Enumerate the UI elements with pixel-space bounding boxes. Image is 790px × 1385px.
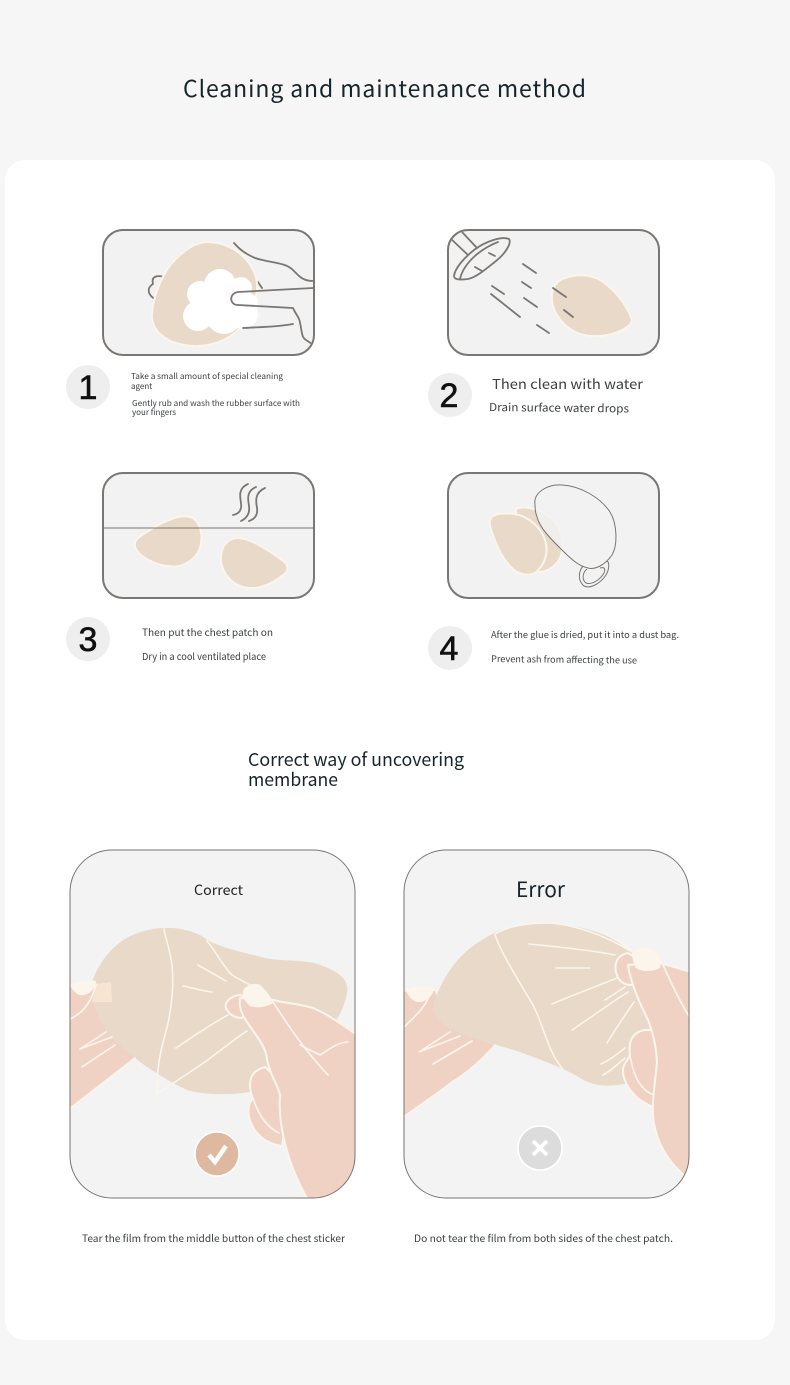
panel: step 2 illustration	[448, 230, 659, 355]
step 1 text	[131, 371, 300, 418]
heading: uncovering membrane	[248, 746, 464, 792]
icon: shower head	[450, 232, 510, 280]
error caption: Do not tear the film from both sides of the chest patch.	[414, 1230, 673, 1245]
right hand lower fingers	[249, 1066, 282, 1145]
step 2 text: Drain surface water drops	[489, 399, 629, 416]
correct caption: Tear the film from the middle button of the chest sticker	[82, 1230, 345, 1245]
label: correct: Correct	[194, 880, 244, 900]
step 3 number	[66, 617, 110, 661]
icon: steam	[233, 484, 265, 521]
step 3 number: 3	[79, 621, 97, 659]
creases	[157, 929, 254, 1094]
step 2 number: 2	[440, 377, 458, 415]
right hand	[614, 952, 632, 986]
step 1 text: agent	[131, 381, 152, 392]
title: Cleaning and maintenance method	[183, 70, 586, 104]
icon: cross mark	[518, 1126, 562, 1170]
step 1 number	[66, 365, 110, 409]
step 4 number	[428, 626, 472, 670]
panel: step 1 illustration	[103, 230, 314, 355]
step 4 number: 4	[440, 630, 458, 668]
step 1 text: your fingers	[132, 407, 176, 418]
step 1 text: Gently rub and wash the rubber surface with	[132, 398, 300, 409]
step 2 text	[489, 373, 644, 416]
panel: correct	[68, 850, 360, 1200]
step 3 text: Dry in a cool ventilated place	[142, 649, 266, 663]
panel: step 4 illustration	[448, 473, 659, 598]
left hand	[402, 987, 495, 1118]
step 3 text: Then put the chest patch on	[142, 624, 273, 639]
step 2 text: Then clean with water	[492, 373, 644, 393]
panel: error	[402, 850, 695, 1198]
step 2 number	[428, 373, 472, 417]
icon: dust bag	[535, 485, 616, 587]
creases	[495, 923, 634, 1075]
step 4 text: After the glue is dried, put it into a dust bag.	[491, 628, 679, 641]
icon: foam	[183, 269, 258, 334]
left hand	[68, 982, 135, 1110]
step 1 text: Take a small amount of special cleaning	[131, 371, 283, 382]
right hand lower fingers	[622, 1029, 656, 1106]
step 4 text: Prevent ash from affecting the use	[491, 652, 637, 667]
heading: uncovering membrane: Correct way of uncovering	[248, 746, 464, 772]
heading: uncovering membrane: membrane	[248, 766, 338, 792]
icon: check mark	[195, 1132, 239, 1176]
step 3 text	[142, 624, 273, 663]
right hand	[224, 994, 244, 1019]
label: error: Error	[516, 874, 566, 904]
step 1 number: 1	[79, 369, 97, 407]
step 4 text	[491, 628, 679, 667]
panel: step 3 illustration	[103, 473, 314, 598]
